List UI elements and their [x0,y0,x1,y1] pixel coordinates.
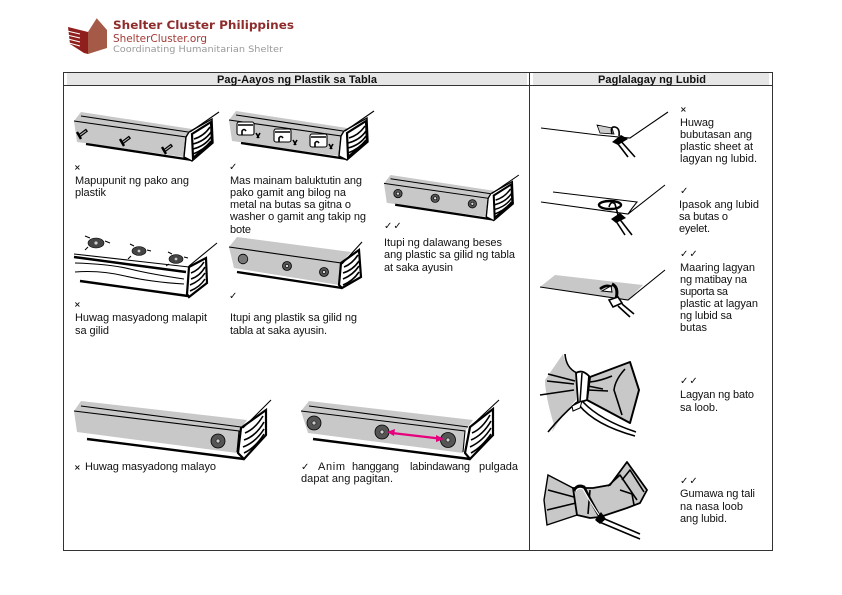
panel: bend nail with washer [229,111,374,236]
panel: too close to edge: sa gilid [75,325,109,337]
panel: put stone inside [540,354,754,436]
mark: check: ✓ [229,162,238,173]
illustration: rope through eyelet [541,185,665,235]
heading: left column: Pag-Aayos ng Plastik sa Tabla [217,74,378,86]
illustration: knot with rope inside [544,462,647,539]
caption: hanggang [352,461,399,473]
logo title: Shelter Cluster Philippines [113,18,294,32]
caption: labindawang [410,461,470,473]
caption: Mas mainam baluktutin ang [230,175,362,187]
panel: use eyelet: eyelet. [679,223,710,235]
panel: fold twice: at saka ayusin [384,262,453,274]
caption: dapat ang pagitan. [301,473,393,485]
mark: cross: × [74,300,81,309]
logo [67,18,294,55]
panel: tie with inner rope: na nasa loob [680,501,743,513]
illustration: nails on wood edge [74,236,217,297]
illustration: double folded board [384,175,519,221]
illustration: folded plastic on board [229,237,362,288]
logo icon: hand and house [67,18,107,54]
panel: use eyelet [541,185,759,235]
panel: fold once: tabla at saka ayusin. [230,325,327,337]
caption: Gumawa ng tali [680,488,755,500]
caption: Lagyan ng bato [680,389,754,401]
illustration: reinforced plastic with rope [540,270,665,317]
caption: Huwag [680,117,714,129]
illustration: tied bundle with stone [540,354,639,436]
illustration: long board with one nail [74,400,271,459]
illustration: board with washers and bent nails [229,111,374,160]
panel: put stone inside: sa loob. [680,402,718,414]
panel: fold once [229,237,362,337]
caption: ✓ [301,462,310,473]
panel: use eyelet: sa butas o [679,211,728,223]
caption: Ipasok ang lubid [679,199,759,211]
panel: bend nail with washer: pako gamit ang bilog na [230,187,347,199]
illustration: long board with spacing arrow [301,400,499,459]
mark: double check: ✓✓ [680,249,699,260]
panel: nail tears plastic: plastik [75,187,106,199]
illustration: rope through plastic [541,112,668,157]
panel: bend nail with washer: bote [230,224,251,236]
mark: double check: ✓✓ [384,221,403,232]
panel: nail tears plastic [74,112,219,199]
panel: tie with inner rope: ang lubid. [680,513,727,525]
mark: check: ✓ [229,291,238,302]
mark: cross: × [680,105,687,114]
caption: Huwag masyadong malapit [75,312,207,324]
logo website: ShelterCluster.org [113,32,207,45]
panel: add reinforcement: suporta sa [680,286,729,298]
caption: pulgada [479,461,519,473]
mark: cross: × [74,163,81,172]
mark: double check: ✓✓ [680,376,699,387]
panel: do not pierce plastic: lagyan ng lubid. [680,153,757,165]
panel: add reinforcement: butas [680,322,708,334]
panel: fold twice [384,175,519,274]
panel: bend nail with washer: washer o gamit ang takip ng [229,211,366,223]
illustration: board with nails [74,112,219,161]
caption: Maaring lagyan [680,262,755,274]
table frame [64,72,772,550]
panel: add reinforcement: ng matibay na [680,274,748,286]
caption: Itupi ng dalawang beses [384,237,502,249]
panel: do not pierce plastic: bubutasan ang [680,129,752,141]
panel: do not pierce plastic: plastic sheet at [680,141,753,153]
caption [301,461,519,485]
caption: Itupi ang plastik sa gilid ng [230,312,357,324]
panel: six to twelve inches [301,400,519,485]
mark: check: ✓ [680,186,689,197]
caption: Huwag masyadong malayo [85,461,216,473]
caption: Anim [318,461,345,473]
panel: bend nail with washer: metal na butas sa gitna o [230,199,351,211]
heading: right column: Paglalagay ng Lubid [598,74,706,86]
panel: too close to edge [74,236,217,337]
panel: fold twice: ang plastic sa gilid ng tabla [384,249,516,261]
panel: add reinforcement: ng lubid sa [680,310,733,322]
caption: Mapupunit ng pako ang [75,175,189,187]
panel: add reinforcement [540,249,758,334]
panel: tie with inner rope [544,462,755,539]
panel: add reinforcement: plastic at lagyan [680,298,758,310]
logo tagline: Coordinating Humanitarian Shelter [113,45,283,55]
panel: do not pierce plastic [541,105,757,165]
arrow: spacing [387,429,444,442]
caption: × [74,463,81,472]
panel: too far apart [74,400,271,473]
mark: double check: ✓✓ [680,476,699,487]
